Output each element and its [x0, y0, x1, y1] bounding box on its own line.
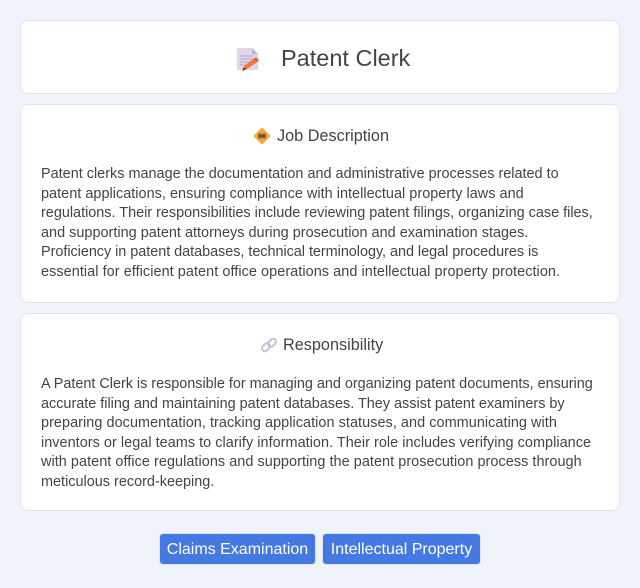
tag: intellectual property: Intellectual Property [331, 541, 472, 558]
heading: job description: Job Description [277, 127, 389, 145]
panel: job description [20, 104, 620, 303]
text block: job description: Patent clerks manage the documentation and administrative processes related to [41, 166, 559, 182]
text block: responsibility [41, 376, 593, 490]
text block: responsibility: A Patent Clerk is responsible for managing and organizing patent documents, ensuring [41, 376, 593, 392]
text block: responsibility: preparing documentation, tracking application statuses, and communicating with [41, 415, 557, 431]
text block: job description: patent applications, ensuring compliance with intellectual property laws and [41, 186, 524, 202]
text block: job description: essential for efficient patent office operations and intellectual property protection. [41, 264, 560, 280]
title: Patent Clerk [281, 45, 410, 71]
tag: claims examination [160, 534, 315, 564]
panel: responsibility [20, 313, 620, 511]
text block: job description: and supporting patent attorneys during prosecution and examination stages. [41, 224, 528, 240]
panel: title card [20, 20, 620, 94]
heading: responsibility: Responsibility [283, 336, 383, 354]
tag: intellectual property [323, 534, 480, 564]
icon: document with pencil [237, 48, 259, 71]
text block: responsibility: inventors or legal teams to clarify information. Their role includes verifying compliance [41, 434, 591, 450]
tag: claims examination: Claims Examination [167, 541, 308, 558]
text block: responsibility: meticulous record-keeping. [41, 474, 214, 490]
icon: construction sign [254, 128, 270, 144]
text block: job description [41, 166, 593, 280]
icon: chain link [261, 338, 277, 352]
text block: job description: regulations. Their responsibilities include reviewing patent filings, organizing case files, [41, 205, 593, 221]
text block: responsibility: accurate filing and maintaining patent databases. They assist patent examiners by [41, 396, 565, 412]
text block: job description: Proficiency in patent databases, technical terminology, and legal procedures is [41, 244, 538, 260]
text block: responsibility: with patent office regulations and supporting the patent prosecution process through [41, 454, 582, 470]
